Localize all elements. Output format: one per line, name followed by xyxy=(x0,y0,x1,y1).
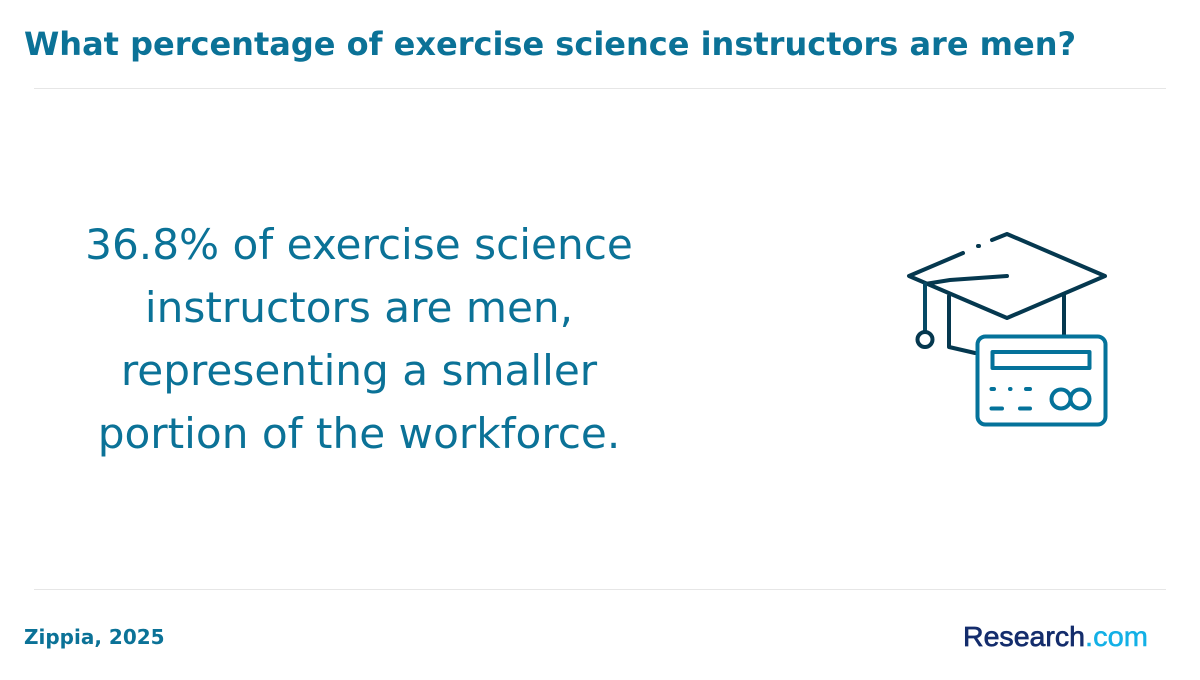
main statement text: 36.8% of exercise science xyxy=(85,220,633,269)
icon: graduation cap with card xyxy=(906,232,1108,426)
logo: Research.com: Research xyxy=(963,621,1085,652)
logo: Research.com xyxy=(963,621,1148,652)
main statement text: instructors are men, xyxy=(145,283,573,332)
main statement text xyxy=(85,220,633,458)
icon part: graduation cap xyxy=(909,234,1105,353)
source: Zippia, 2025 xyxy=(24,624,165,648)
main statement text: representing a smaller xyxy=(121,346,597,395)
logo: Research.com: .com xyxy=(1085,621,1148,652)
title: What percentage of exercise science instructors are men? xyxy=(24,24,1076,62)
main statement text: portion of the workforce. xyxy=(98,409,620,458)
icon part: card xyxy=(978,336,1106,424)
